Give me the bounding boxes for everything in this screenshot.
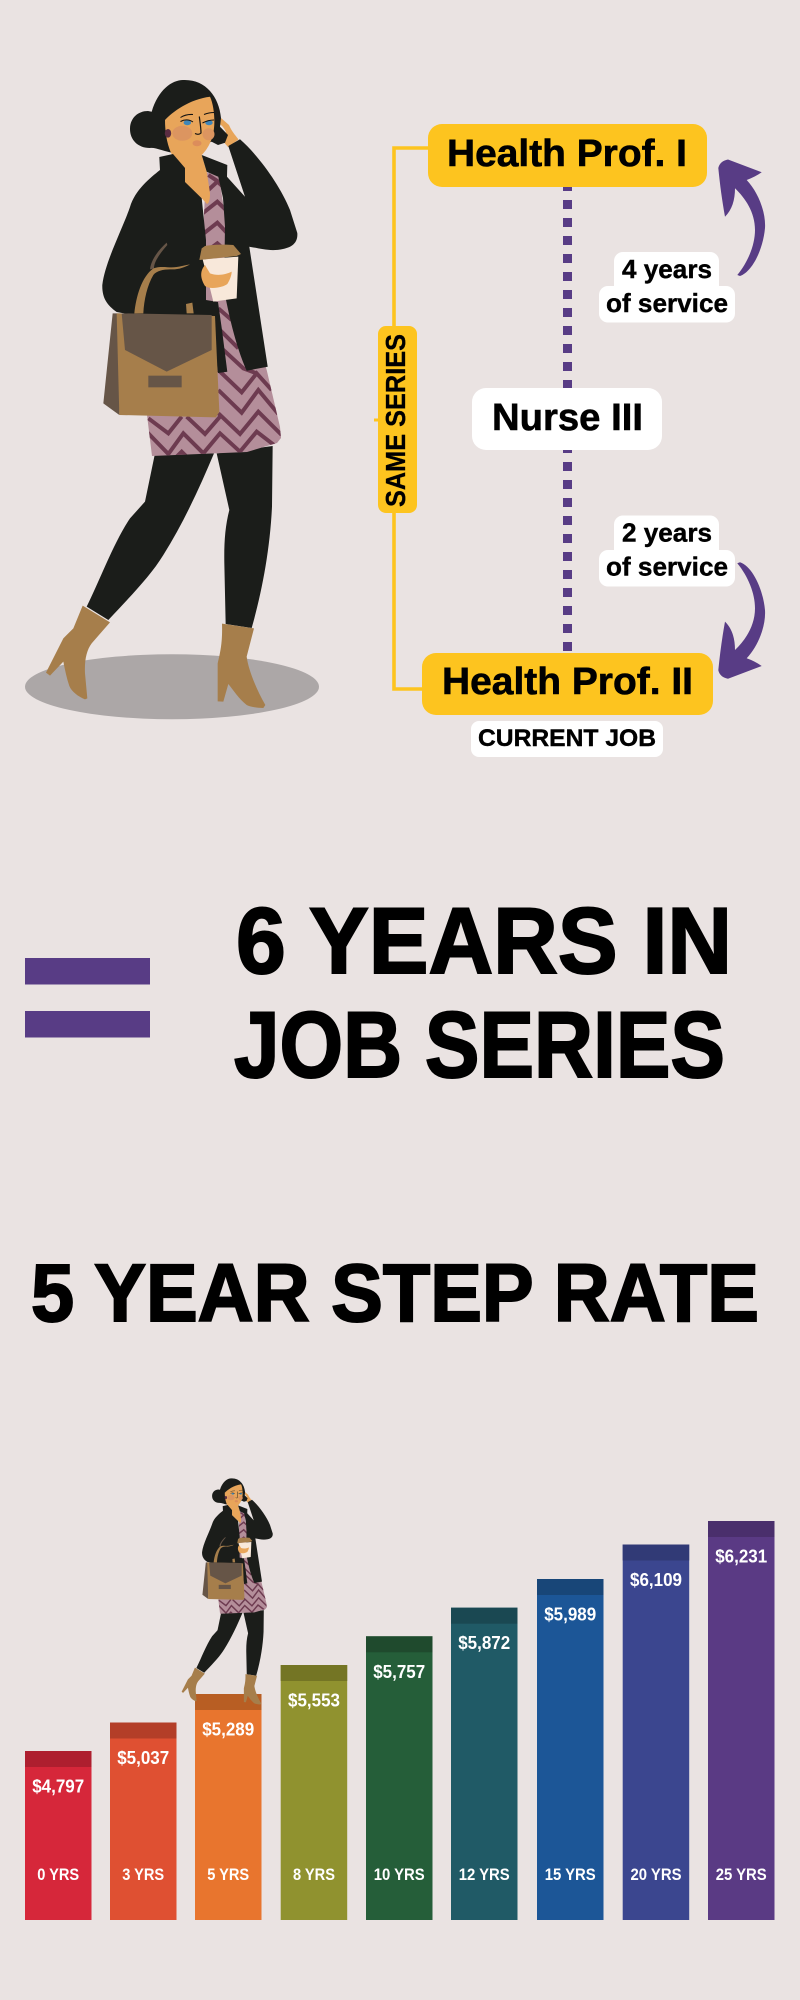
bar: 25 years: 25 YRS — [716, 1865, 767, 1884]
bar: 15 years: $5,989 — [544, 1604, 596, 1624]
face and neck — [165, 97, 214, 204]
bar: 12 years: 12 YRS — [459, 1865, 510, 1884]
illustration: small woman standing on the 5 years bar — [182, 1478, 273, 1704]
bar chart: step rate by years of service — [25, 1521, 774, 1920]
hand — [201, 265, 232, 288]
bar: 20 years: 20 YRS — [630, 1865, 682, 1884]
jacket left side — [102, 154, 227, 373]
back boot — [46, 606, 110, 699]
jacket right side and arm — [202, 139, 297, 371]
bag side panel — [103, 313, 122, 415]
bar: 20 years: $6,109 — [630, 1569, 682, 1590]
badge: same series — [374, 326, 417, 513]
bar: 0 years: 0 YRS — [37, 1865, 79, 1884]
woman figure — [46, 80, 297, 708]
bar: 3 years: 3 YRS — [122, 1865, 164, 1884]
bag straps and strand — [134, 243, 194, 313]
headline: 6 years in job series: 6 YEARS IN — [236, 888, 732, 993]
bar: 12 years: $5,872 — [458, 1632, 510, 1653]
eyes — [180, 112, 214, 134]
label: 4 years of service: 4 years — [622, 254, 712, 284]
bar: 3 years: $5,037 — [117, 1747, 169, 1768]
illustration: woman walking with phone, coffee and handbag — [25, 80, 319, 719]
lips — [192, 140, 202, 146]
bar: 8 years: 8 YRS — [293, 1865, 335, 1884]
bar: 5 years: $5,289 — [202, 1718, 254, 1740]
label: 2 years of service: of service — [606, 552, 728, 582]
bag front — [117, 313, 219, 417]
bar: 5 years: 5 YRS — [207, 1865, 249, 1884]
bar: 5 years — [195, 1694, 262, 1920]
bar: 8 years — [281, 1665, 347, 1920]
bar: 0 years: $4,797 — [32, 1776, 84, 1796]
cup lid — [199, 245, 241, 260]
earring — [165, 129, 171, 138]
job box: Nurse III: Nurse III — [492, 397, 643, 439]
bar: 25 years: $6,231 — [715, 1546, 767, 1566]
ground shadow — [25, 654, 319, 719]
back leg — [87, 453, 214, 620]
bar: 3 years — [110, 1722, 176, 1920]
front boot — [218, 624, 265, 708]
headline: 6 years in job series: JOB SERIES — [234, 992, 725, 1097]
badge: current job: CURRENT JOB — [478, 725, 656, 752]
bar: 0 years — [25, 1751, 92, 1920]
job box: Health Prof. I — [428, 124, 707, 187]
bar: 20 years — [623, 1544, 689, 1920]
bar: 15 years: 15 YRS — [545, 1865, 596, 1884]
bar: 10 years: 10 YRS — [374, 1865, 425, 1884]
label: 4 years of service — [599, 252, 735, 322]
bar: 10 years — [366, 1636, 432, 1920]
job box: Health Prof. II: Health Prof. II — [442, 661, 693, 703]
bracket: yellow line connecting job titles — [394, 148, 428, 689]
job box: Nurse III — [472, 388, 662, 450]
headline: 6 years in job series — [234, 888, 732, 1097]
label: 2 years of service: 2 years — [622, 518, 712, 548]
arrow: down to Health Prof. II — [718, 562, 765, 679]
arrow: up to Health Prof. I — [718, 160, 765, 276]
cup body — [203, 257, 238, 302]
blush left — [172, 126, 192, 141]
badge: same series: SAME SERIES — [380, 334, 411, 507]
hand on ear — [219, 118, 238, 147]
bar: 10 years: $5,757 — [373, 1661, 425, 1682]
front leg — [217, 446, 273, 628]
dotted line: career ladder — [563, 187, 572, 651]
coffee cup with hand — [199, 245, 241, 302]
job box: Health Prof. II — [422, 653, 713, 715]
bag — [103, 313, 219, 417]
bar: 25 years — [708, 1521, 774, 1920]
dress — [147, 172, 281, 456]
bar: 15 years — [537, 1579, 604, 1920]
dress chevrons — [147, 175, 282, 458]
blush right — [202, 128, 214, 140]
label: 4 years of service: of service — [606, 288, 728, 318]
bar: 12 years — [451, 1608, 518, 1920]
headline: 5 year step rate: 5 YEAR STEP RATE — [31, 1248, 759, 1339]
hair and bun — [130, 80, 228, 153]
label: 2 years of service — [599, 516, 735, 586]
job box: Health Prof. I: Health Prof. I — [447, 133, 687, 175]
bar: 8 years: $5,553 — [288, 1690, 340, 1710]
badge: current job — [471, 721, 663, 757]
bag flap — [122, 313, 212, 372]
bag buckle — [148, 376, 182, 387]
equals sign — [25, 958, 150, 1038]
